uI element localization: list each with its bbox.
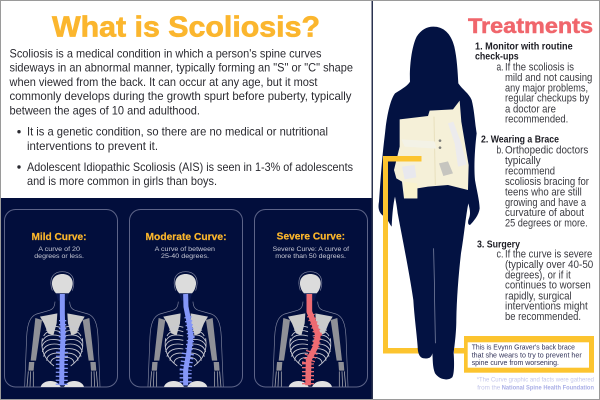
skeleton with moderate spine: [148, 272, 223, 387]
callout: brace caption: [464, 336, 594, 373]
treatment 1: monitor: a doctor are: [505, 103, 556, 115]
card: mild curve: degrees or less.: [34, 253, 84, 260]
treatment 3: surgery: 3. Surgery: [477, 239, 520, 250]
treatment 2: brace: curvature of about: [505, 207, 585, 219]
intro paragraph: Scoliosis is a medical condition in which a person's spine curves: [10, 48, 322, 60]
treatment 1: monitor: a.: [496, 61, 504, 73]
callout: brace caption: This is Evynn Graver's back brace: [472, 342, 575, 352]
bullet: genetic condition: It is a genetic condition, so there are no medical or nutritional: [27, 126, 328, 138]
card: mild curve: [4, 210, 118, 387]
connector: yellow bracket from brace to caption: [383, 156, 464, 354]
panel: curve types: [0, 198, 372, 400]
treatment 3: surgery: be recommended.: [505, 311, 581, 323]
treatment 2: brace: recommend: [505, 165, 555, 177]
card: moderate curve: [130, 210, 242, 387]
title: What is Scoliosis?: [52, 12, 320, 44]
skeleton with severe spine: [273, 272, 348, 387]
panel: what is scoliosis: [9, 12, 353, 188]
treatment 2: brace: b.: [496, 145, 504, 157]
bullet: genetic condition: interventions to prevent it.: [27, 140, 158, 153]
silhouette: [379, 27, 480, 379]
treatment 2: brace: typically: [505, 155, 541, 167]
treatment 2: brace: teens who are still: [505, 186, 582, 198]
treatment 2: brace: [481, 135, 589, 229]
card: severe curve: Severe Curve:: [277, 231, 345, 242]
figure: silhouette wearing back brace: [379, 27, 480, 379]
card: moderate curve: A curve of between: [155, 246, 215, 253]
intro paragraph: [9, 48, 353, 118]
card: mild curve: A curve of 20: [38, 246, 80, 253]
intro paragraph: sideways in an abnormal manner, typically forming an "S" or "C" shape: [10, 62, 353, 74]
treatment 3: surgery: rapidly, surgical: [505, 290, 572, 302]
connector: lower yellow line behind feet: [383, 348, 419, 354]
card: severe curve: [254, 210, 368, 387]
footnote: source: [477, 377, 594, 391]
bullet: AIS prevalence: [17, 161, 353, 188]
bullet: genetic condition: [17, 126, 328, 153]
treatment 1: monitor: recommended.: [505, 113, 568, 125]
treatment 3: surgery: [477, 239, 593, 323]
card: moderate curve: 25-40 degrees.: [161, 253, 209, 260]
treatment 3: surgery: c.: [496, 248, 504, 260]
footnote: source: from the: [477, 384, 501, 391]
intro paragraph: commonly develops during the growth spurt before puberty, typically: [10, 90, 352, 103]
card: severe curve: more than 50 degrees.: [275, 253, 346, 260]
card: mild curve: Mild Curve:: [32, 232, 86, 243]
callout: brace caption: spine curve from worsening.: [472, 358, 559, 367]
treatment 1: monitor: check-ups: [475, 51, 519, 62]
intro paragraph: when viewed from the back. It can occur at any age, but it most: [9, 76, 318, 89]
treatment 3: surgery: degrees), or if it: [505, 269, 571, 281]
treatment 2: brace: 2. Wearing a Brace: [481, 135, 559, 146]
heading: treatments: Treatments: [468, 15, 593, 38]
treatment 1: monitor: [475, 41, 592, 125]
treatment 1: monitor: 1. Monitor with routine: [475, 41, 573, 52]
divider between columns: [372, 0, 373, 400]
intro paragraph: between the ages of 10 and adulthood.: [10, 104, 200, 118]
bullet: AIS prevalence: Adolescent Idiopathic Scoliosis (AIS) is seen in 1-3% of adolescents: [27, 161, 353, 174]
treatment 3: surgery: interventions might: [505, 301, 588, 313]
skeleton with mild spine: [25, 272, 100, 387]
card: severe curve: Severe Curve: A curve of: [273, 246, 349, 253]
treatment 1: monitor: If the scoliosis is: [505, 61, 574, 73]
back brace: [394, 101, 469, 198]
card: moderate curve: Moderate Curve:: [146, 232, 226, 243]
footnote: source: *The Curve graphic and facts were gathered: [477, 377, 594, 384]
callout: brace caption: that she wears to try to prevent her: [472, 350, 582, 359]
treatment 2: brace: Orthopedic doctors: [505, 145, 589, 157]
bullet: AIS prevalence: and is more common in girls than boys.: [27, 175, 217, 188]
